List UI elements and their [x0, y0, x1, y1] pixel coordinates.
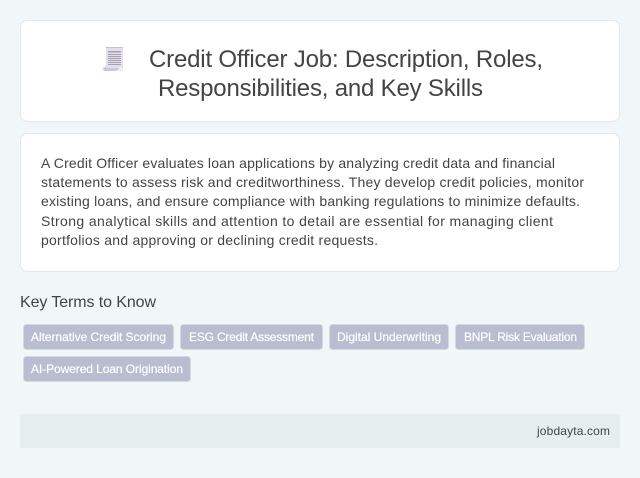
text block: description: Strong analytical skills and attention to detail are essential for managing client [41, 213, 553, 229]
icon: paper receipt [103, 47, 123, 71]
title: Credit Officer Job: Description, Roles, [149, 46, 543, 73]
heading: key terms: Key Terms to Know [20, 294, 156, 311]
chip: bnpl risk evaluation [456, 324, 584, 350]
title [149, 46, 543, 102]
text block: description: A Credit Officer evaluates loan applications by analyzing credit data and financial [41, 155, 555, 171]
chip: digital underwriting [330, 324, 448, 350]
text block: description: existing loans, and ensure compliance with banking regulations to minimize defaults. [41, 193, 580, 209]
chip group: key terms [24, 324, 584, 382]
panel: description [20, 134, 620, 272]
panel: title card [20, 20, 620, 122]
text block: description: portfolios and approving or declining credit requests. [41, 232, 378, 248]
text block: description: statements to assess risk and creditworthiness. They develop credit policies, monitor [41, 174, 584, 190]
chip: alternative credit scoring [24, 324, 174, 350]
chip: alternative credit scoring: Alternative Credit Scoring [31, 330, 166, 344]
chip: ai-powered loan origination [24, 356, 190, 382]
footer bar [20, 414, 620, 448]
title: Responsibilities, and Key Skills [158, 75, 483, 102]
chip: ai-powered loan origination: AI-Powered Loan Origination [31, 362, 183, 376]
chip: esg credit assessment: ESG Credit Assessment [189, 330, 315, 344]
chip: esg credit assessment [180, 324, 322, 350]
chip: digital underwriting: Digital Underwriting [337, 330, 441, 344]
chip: bnpl risk evaluation: BNPL Risk Evaluation [464, 330, 577, 344]
footer source text: jobdayta.com [536, 424, 610, 438]
text block: description [41, 155, 584, 248]
